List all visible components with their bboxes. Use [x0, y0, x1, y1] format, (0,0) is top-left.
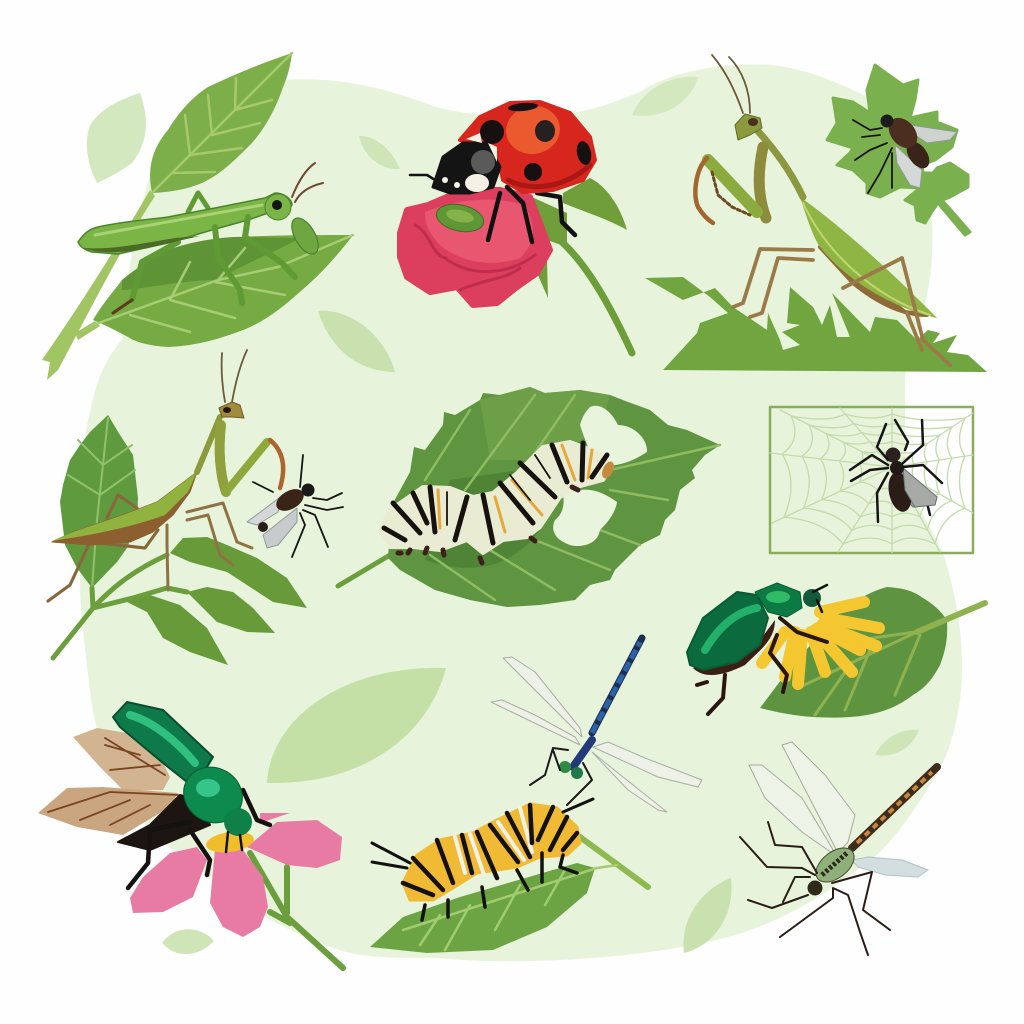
orange dragonfly: [740, 742, 937, 955]
bite holes: [580, 406, 647, 466]
caterpillar on leaf: [370, 799, 648, 953]
beetle: [697, 618, 827, 714]
shell: [460, 102, 595, 192]
ladybug legs: [488, 187, 575, 242]
background blob: [79, 64, 962, 961]
wings: [73, 728, 170, 790]
fly on leaves: [827, 65, 970, 235]
thorax and head: [174, 757, 252, 833]
fly left: [247, 455, 343, 557]
head: [735, 114, 762, 140]
leaf: [760, 587, 947, 718]
forelegs: [759, 147, 766, 218]
decorative pale leaves: [87, 77, 919, 954]
body: [820, 247, 927, 315]
legs: [733, 249, 950, 365]
dark abdomen and legs: [118, 795, 210, 850]
mantis body: [52, 472, 197, 545]
head: [433, 143, 500, 193]
grass mound: [645, 277, 987, 372]
stick insect: [78, 163, 324, 313]
elytron: [113, 702, 213, 782]
stem: [250, 853, 343, 968]
stem and leaves: [523, 178, 632, 353]
yellow petals: [762, 602, 879, 684]
ladybug on flower: [400, 102, 632, 353]
pink petals: [130, 813, 342, 937]
back leaf: [60, 415, 138, 588]
mantis left with leaves: [48, 350, 307, 665]
leaves: top left: [42, 53, 353, 380]
caterpillar: [380, 442, 612, 553]
mantis hind legs: [48, 495, 158, 601]
spider web box: [770, 407, 973, 553]
flying green beetle on pink flower: [38, 702, 343, 968]
centre leaf with caterpillar: [338, 387, 720, 607]
green beetle on yellow flower: [687, 583, 985, 718]
mantis top right: [645, 55, 987, 372]
pink flower: [400, 190, 550, 305]
blue dragonfly: [491, 638, 702, 812]
branch and leaves: [53, 537, 307, 665]
